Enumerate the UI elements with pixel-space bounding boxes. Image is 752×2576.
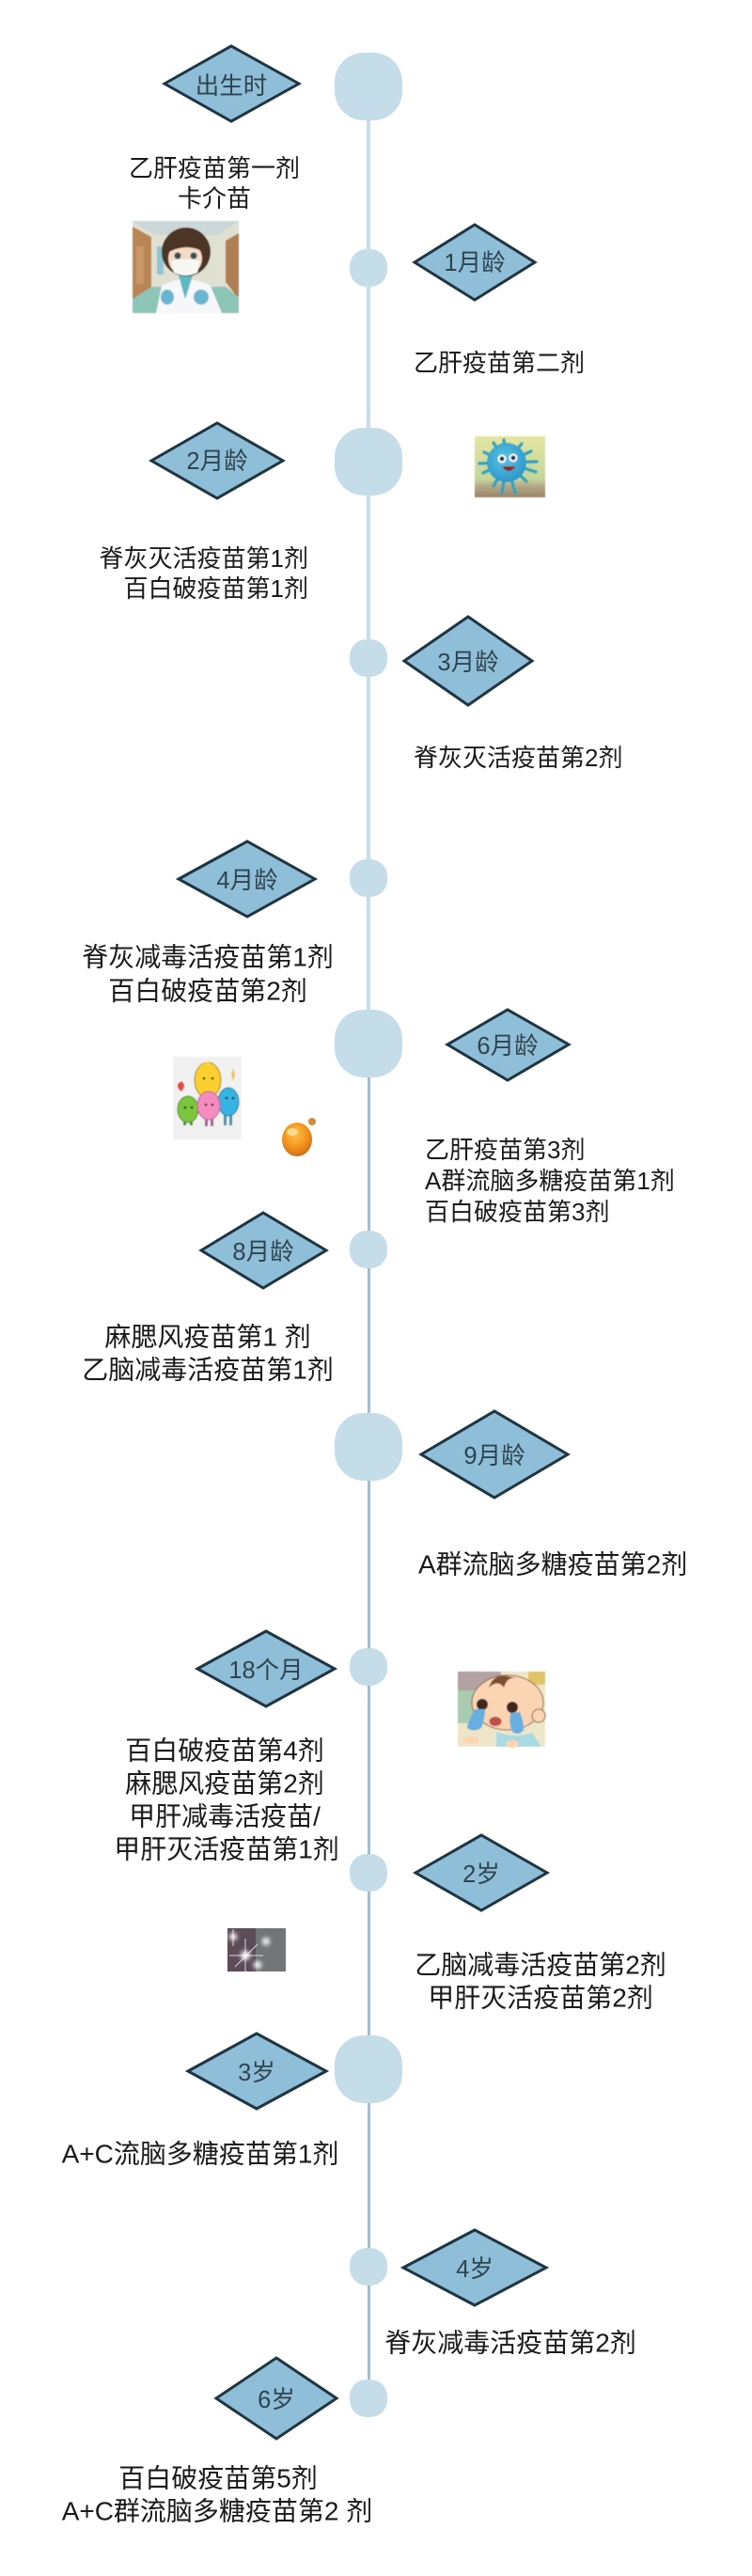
milestone: birth — [164, 46, 299, 121]
milestone: 2 months: 2月龄 — [186, 448, 248, 475]
image: starry sky — [227, 1928, 286, 1971]
vaccines: 6 years: 百白破疫苗第5剂 — [118, 2463, 318, 2493]
milestone: 4 years — [403, 2230, 546, 2305]
vaccines: birth: 卡介苗 — [178, 184, 251, 212]
vaccines: 4 months: 脊灰减毒活疫苗第1剂 — [82, 942, 334, 972]
milestone: 3 months — [404, 617, 532, 705]
image: smiling virus — [475, 436, 545, 497]
vaccines: 2 months: 脊灰灭活疫苗第1剂 — [100, 544, 308, 573]
vaccines: 6 months: 百白破疫苗第3剂 — [425, 1198, 609, 1226]
milestone: 6 months: 6月龄 — [477, 1033, 539, 1060]
milestone: 6 months — [447, 1010, 569, 1080]
vaccines: 6 years — [62, 2463, 372, 2525]
vaccines: 2 years — [415, 1950, 666, 2012]
milestone: 4 years: 4岁 — [456, 2256, 494, 2283]
milestone: 2 years — [415, 1835, 547, 1910]
vaccines: 18 months — [114, 1736, 339, 1863]
node markers — [335, 53, 402, 2417]
image: crying baby — [458, 1672, 545, 1748]
milestone: 1 month: 1月龄 — [444, 250, 506, 276]
vaccines: 8 months: 乙脑减毒活疫苗第1剂 — [82, 1356, 334, 1384]
vaccines: 2 years: 甲肝灭活疫苗第2剂 — [428, 1984, 653, 2012]
vaccines: 3 months: 脊灰灭活疫苗第2剂 — [414, 744, 622, 772]
image: doctor girl — [133, 221, 239, 313]
vaccines: 2 months — [100, 544, 308, 603]
milestone: 6 years — [216, 2358, 337, 2439]
vaccines: 6 months: A群流脑多糖疫苗第1剂 — [425, 1167, 675, 1195]
vaccines: 6 months — [425, 1136, 675, 1226]
vaccines: 18 months: 甲肝减毒活疫苗/ — [129, 1801, 321, 1831]
timeline axis — [367, 86, 370, 2398]
vaccines: 4 months — [82, 942, 334, 1006]
milestone: 18 months — [197, 1631, 335, 1706]
vaccines: 4 years: 脊灰减毒活疫苗第2剂 — [384, 2328, 636, 2358]
vaccines: 9 months: A群流脑多糖疫苗第2剂 — [418, 1549, 687, 1579]
milestone: 9 months — [421, 1411, 568, 1498]
vaccines: 8 months: 麻腮风疫苗第1 剂 — [104, 1322, 311, 1352]
milestone: 4 months — [179, 841, 315, 917]
milestone: 9 months: 9月龄 — [463, 1443, 525, 1469]
milestone: 18 months: 18个月 — [228, 1657, 304, 1684]
vaccines: birth — [129, 154, 300, 212]
milestone: 8 months: 8月龄 — [232, 1239, 294, 1265]
milestone: 8 months — [201, 1213, 326, 1288]
vaccines: 3 years: A+C流脑多糖疫苗第1剂 — [62, 2140, 338, 2168]
vaccines: 18 months: 百白破疫苗第4剂 — [125, 1736, 324, 1766]
vaccines: 6 years: A+C群流脑多糖疫苗第2 剂 — [62, 2497, 372, 2525]
vaccines: 4 months: 百白破疫苗第2剂 — [108, 976, 307, 1006]
milestone: 3 years: 3岁 — [238, 2060, 275, 2086]
milestone: 6 years: 6岁 — [258, 2387, 295, 2413]
vaccines: birth: 乙肝疫苗第一剂 — [129, 154, 300, 182]
milestone: 4 months: 4月龄 — [216, 868, 278, 894]
vaccines: 2 months: 百白破疫苗第1剂 — [124, 574, 308, 603]
vaccines: 2 years: 乙脑减毒活疫苗第2剂 — [415, 1950, 666, 1980]
vaccines: 18 months: 甲肝灭活疫苗第1剂 — [114, 1835, 339, 1863]
milestone: 1 month — [415, 225, 535, 300]
image: orange ball — [282, 1118, 316, 1156]
vaccines: 8 months — [82, 1322, 334, 1384]
milestone: 2 years: 2岁 — [462, 1861, 500, 1888]
milestone: 2 months — [151, 423, 283, 498]
vaccines: 18 months: 麻腮风疫苗第2剂 — [125, 1769, 324, 1798]
milestone: 3 years — [188, 2034, 326, 2109]
vaccines: 1 month: 乙肝疫苗第二剂 — [414, 349, 585, 377]
vaccines: 6 months: 乙肝疫苗第3剂 — [425, 1136, 585, 1164]
milestone: birth: 出生时 — [196, 73, 267, 100]
image: colorful jelly beans — [173, 1057, 242, 1139]
milestone: 3 months: 3月龄 — [437, 650, 499, 676]
